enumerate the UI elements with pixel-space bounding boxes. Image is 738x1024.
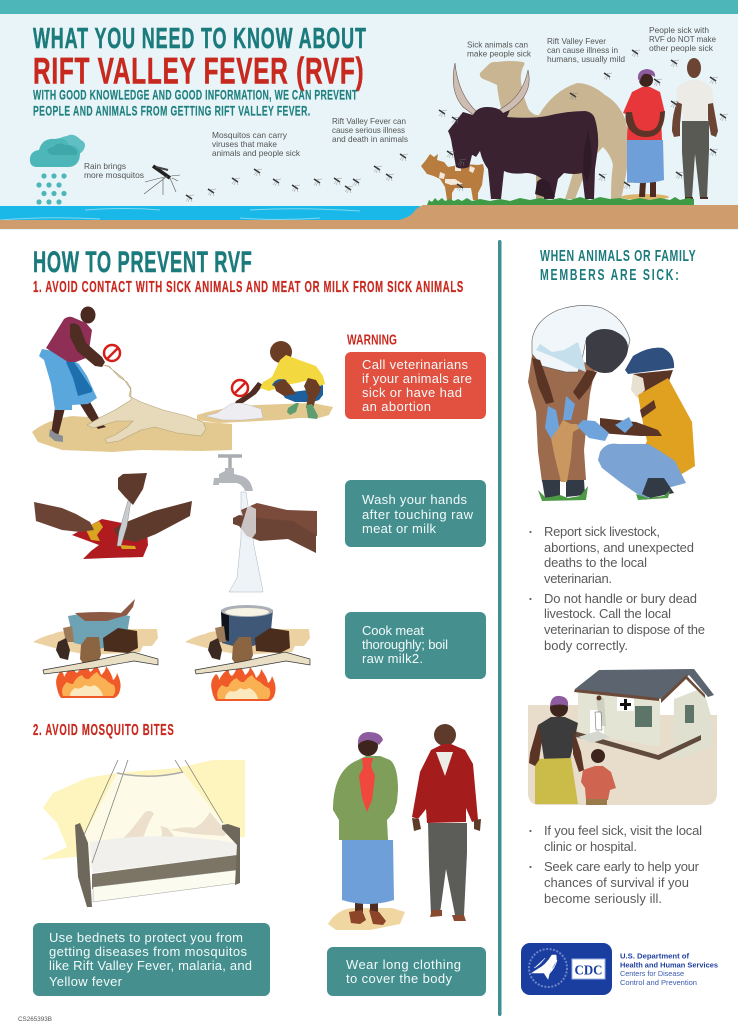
text: visit clinic bbox=[529, 823, 702, 854]
text: seek care early: Seek care early to help your bbox=[544, 859, 700, 874]
illustration: vets examining calf bbox=[528, 305, 695, 501]
callout: call veterinarians bbox=[345, 352, 486, 419]
logo: HHS and CDC: CDC bbox=[574, 964, 602, 978]
illustration: camel bbox=[480, 61, 629, 201]
callout: long clothing: Wear long clothing bbox=[346, 957, 461, 972]
illustration: bull bbox=[448, 63, 598, 199]
label: sick animals bbox=[467, 40, 532, 58]
text: visit clinic: If you feel sick, visit the local bbox=[544, 823, 702, 838]
subtitle: PEOPLE AND ANIMALS FROM GETTING RIFT VALLEY FEVER. bbox=[33, 104, 310, 119]
label: mosquitos carry viruses bbox=[212, 131, 301, 158]
text: seek care early bbox=[529, 859, 700, 906]
illustration: woman pulling dead animal bbox=[32, 306, 232, 452]
callout: use bednets bbox=[33, 923, 270, 996]
mosquitos swarm bbox=[186, 50, 728, 202]
text: report sick livestock: abortions, and unexpected bbox=[544, 540, 694, 555]
illustration: boy touching dead animal bbox=[197, 341, 333, 423]
callout: cook meat: thoroughly; boil bbox=[362, 637, 448, 652]
illustration: tap and washing hands bbox=[213, 456, 317, 592]
text: report sick livestock: Report sick livestock, bbox=[544, 524, 660, 539]
illustration: sick woman bbox=[621, 69, 669, 200]
text: report sick livestock: deaths to the local bbox=[544, 555, 647, 570]
callout: call veterinarians: Call veterinarians bbox=[362, 357, 468, 372]
heading: avoid mosquito bites: 2. AVOID MOSQUITO BITES bbox=[33, 721, 174, 739]
label: serious illness in animals: Rift Valley Fever can bbox=[332, 117, 406, 126]
callout: cook meat: raw milk2. bbox=[362, 651, 423, 666]
logo: HHS and CDC bbox=[521, 943, 718, 995]
icon: no symbol bbox=[232, 380, 248, 396]
text: do not handle dead livestock: body correctly. bbox=[544, 638, 628, 653]
illustration: people in long clothing bbox=[328, 724, 481, 930]
label: illness in humans: Rift Valley Fever bbox=[547, 37, 606, 46]
illustration: sick man bbox=[672, 58, 718, 199]
text: do not handle dead livestock: veterinarian to dispose of the bbox=[544, 622, 705, 637]
text: do not handle dead livestock bbox=[529, 591, 705, 653]
callout: cook meat bbox=[345, 612, 486, 679]
text: report sick livestock bbox=[529, 524, 694, 586]
heading: when animals or family members are sick bbox=[540, 247, 696, 284]
title bbox=[33, 23, 366, 92]
panel: header banner bbox=[0, 0, 738, 230]
icon: large mosquito bbox=[144, 166, 180, 195]
illustration: bed with net bbox=[40, 760, 245, 907]
water and ground bbox=[0, 205, 738, 229]
callout: call veterinarians: sick or have had bbox=[362, 385, 462, 400]
label: illness in humans bbox=[547, 37, 625, 64]
heading: warning: WARNING bbox=[347, 330, 397, 348]
text: visit clinic: clinic or hospital. bbox=[544, 839, 637, 854]
icon: no symbol bbox=[104, 345, 120, 361]
text: seek care early: chances of survival if you bbox=[544, 875, 689, 890]
callout: wash hands: meat or milk bbox=[362, 521, 436, 536]
label: people do not spread: RVF do NOT make bbox=[649, 35, 716, 44]
label: rain brings more mosquitos: Rain brings bbox=[84, 162, 126, 171]
document code: CS265393B bbox=[18, 1017, 52, 1023]
logo: HHS and CDC: Centers for Disease bbox=[620, 969, 684, 978]
title: RIFT VALLEY FEVER (RVF) bbox=[33, 50, 364, 92]
callout: use bednets: Yellow fever bbox=[49, 974, 123, 989]
text: report sick livestock: veterinarian. bbox=[544, 571, 612, 586]
heading: when animals or family members are sick: MEMBERS ARE SICK: bbox=[540, 266, 679, 284]
grass strip bbox=[427, 197, 694, 205]
callout: wash hands: after touching raw bbox=[362, 507, 474, 522]
callout: call veterinarians: if your animals are bbox=[362, 371, 472, 386]
heading: how to prevent RVF: HOW TO PREVENT RVF bbox=[33, 247, 252, 279]
label: sick animals: Sick animals can bbox=[467, 40, 528, 50]
callout: wash hands bbox=[345, 480, 486, 547]
text: seek care early: become seriously ill. bbox=[544, 891, 662, 906]
icon: rain cloud bbox=[30, 135, 85, 205]
label: rain brings more mosquitos: more mosquitos bbox=[84, 171, 144, 180]
callout: long clothing: to cover the body bbox=[346, 971, 452, 986]
callout: use bednets: getting diseases from mosquitos bbox=[49, 944, 248, 959]
label: people do not spread: People sick with bbox=[649, 26, 709, 35]
label: people do not spread bbox=[649, 26, 716, 53]
callout: use bednets: Use bednets to protect you from bbox=[49, 930, 243, 945]
logo: HHS and CDC: Health and Human Services bbox=[620, 960, 718, 970]
callout: use bednets: like Rift Valley Fever, malaria, and bbox=[49, 958, 252, 973]
text: do not handle dead livestock: Do not handle or bury dead bbox=[544, 591, 697, 606]
callout: call veterinarians: an abortion bbox=[362, 399, 431, 414]
illustration: family going to clinic bbox=[528, 669, 717, 805]
heading: when animals or family members are sick: WHEN ANIMALS OR FAMILY bbox=[540, 247, 696, 265]
text: do not handle dead livestock: livestock. Call the local bbox=[544, 606, 671, 621]
label: mosquitos carry viruses: animals and people sick bbox=[212, 149, 301, 158]
label: illness in humans: can cause illness in bbox=[547, 46, 618, 55]
label: serious illness in animals: and death in animals bbox=[332, 135, 408, 144]
logo: HHS and CDC: Control and Prevention bbox=[620, 978, 697, 987]
illustration: cooking meat over fire bbox=[33, 599, 158, 698]
label: mosquitos carry viruses: viruses that make bbox=[212, 140, 277, 149]
label: people do not spread: other people sick bbox=[649, 44, 714, 53]
illustration: hands cutting raw meat bbox=[34, 473, 192, 559]
label: serious illness in animals: cause serious illness bbox=[332, 126, 405, 135]
illustration: boiling milk over fire bbox=[185, 605, 310, 701]
callout: wash hands: Wash your hands bbox=[362, 492, 468, 507]
label: sick animals: make people sick bbox=[467, 50, 532, 58]
label: illness in humans: humans, usually mild bbox=[547, 55, 625, 64]
heading: avoid contact: 1. AVOID CONTACT WITH SICK ANIMALS AND MEAT OR MILK FROM SICK ANIMALS bbox=[33, 278, 464, 296]
column divider bbox=[498, 240, 502, 1016]
label: mosquitos carry viruses: Mosquitos can carry bbox=[212, 131, 288, 140]
subtitle: WITH GOOD KNOWLEDGE AND GOOD INFORMATION, WE CAN PREVENT bbox=[33, 87, 357, 103]
label: serious illness in animals bbox=[332, 117, 408, 144]
illustration: goat bbox=[421, 154, 484, 200]
label: rain brings more mosquitos bbox=[84, 162, 144, 180]
subtitle bbox=[33, 87, 357, 119]
title: WHAT YOU NEED TO KNOW ABOUT bbox=[33, 23, 366, 55]
callout: long clothing bbox=[327, 947, 486, 996]
callout: cook meat: Cook meat bbox=[362, 623, 424, 638]
logo: HHS and CDC: U.S. Department of bbox=[620, 952, 690, 960]
